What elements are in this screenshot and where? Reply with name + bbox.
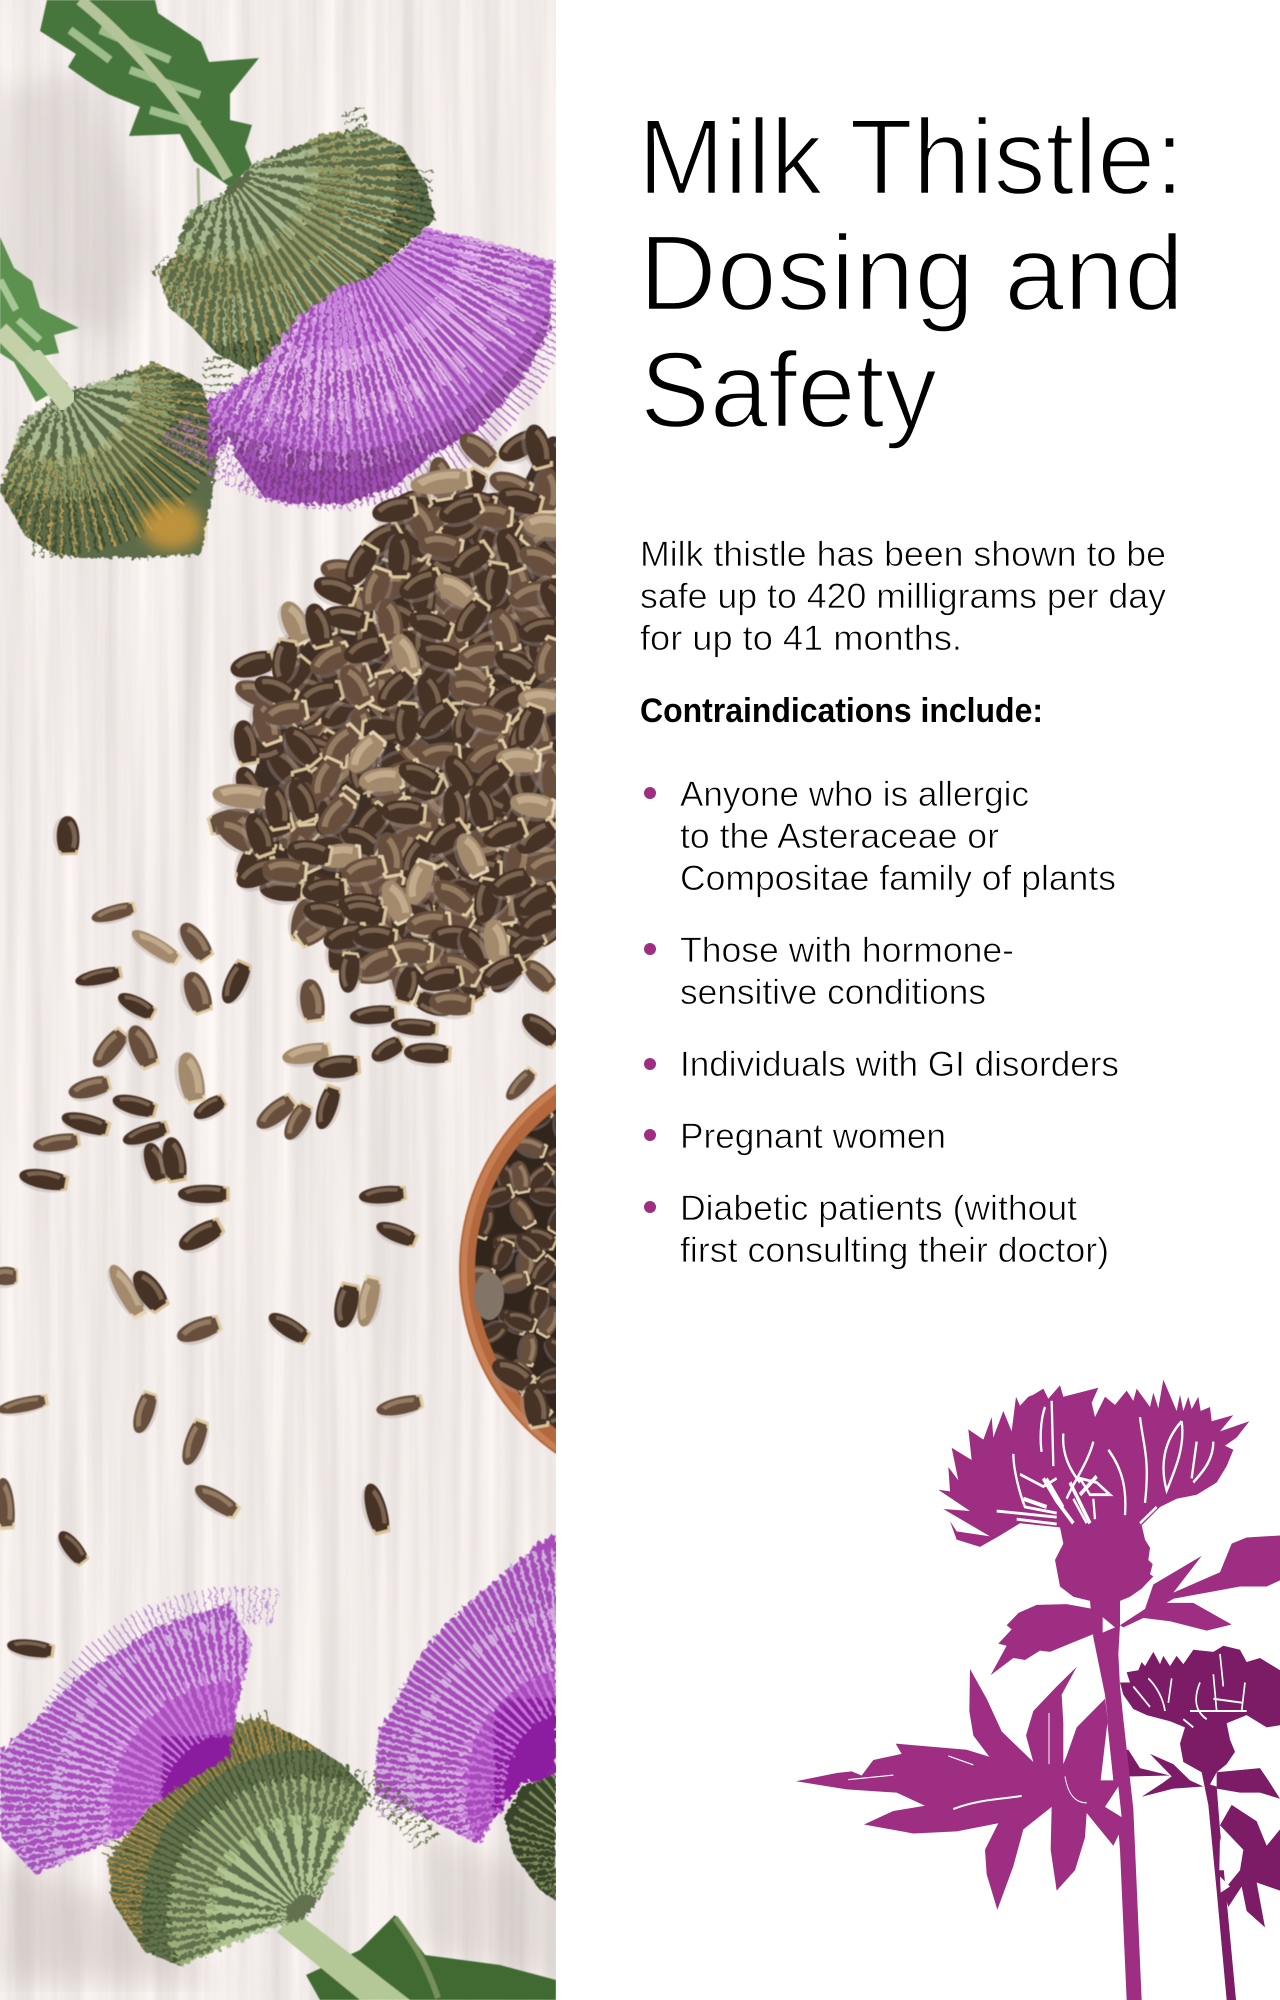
list item: allergy: to the Asteraceae or	[680, 817, 999, 856]
stem of left flower head	[30, 355, 70, 405]
intro text: for up to 41 months.	[640, 619, 962, 658]
small dark thistle	[1102, 1646, 1280, 2000]
stem and leaves: bottom flower	[277, 1912, 556, 2000]
title: Milk Thistle:	[638, 96, 1184, 217]
dark green bud: bottom right	[503, 1773, 556, 1902]
large thistle	[796, 1380, 1280, 2000]
green bud: left	[0, 355, 235, 562]
intro text: safe up to 420 milligrams per day	[640, 577, 1166, 616]
list item: diabetic patients: Diabetic patients (without	[680, 1189, 1077, 1228]
list item: allergy	[644, 775, 1116, 898]
green bud: bottom	[100, 1709, 441, 1968]
leaf and stem: top flower	[40, 0, 259, 210]
list item: hormone-sensitive conditions: sensitive conditions	[680, 973, 986, 1012]
wooden bowl of seeds	[458, 1083, 556, 1455]
list item: diabetic patients	[644, 1189, 1109, 1270]
wood background	[0, 0, 556, 2000]
list item: diabetic patients: first consulting their doctor)	[680, 1231, 1109, 1270]
purple flower: top	[161, 226, 556, 512]
title: Safety	[640, 329, 937, 450]
list item: allergy: Compositae family of plants	[680, 859, 1116, 898]
leaf and stem: left flower	[0, 237, 79, 402]
list item: hormone-sensitive conditions: Those with hormone-	[680, 931, 1014, 970]
intro text	[640, 535, 1166, 658]
list item: GI disorders: Individuals with GI disorders	[680, 1045, 1119, 1084]
title: Dosing and	[639, 212, 1184, 333]
list item: pregnant women: Pregnant women	[680, 1117, 946, 1156]
purple flower: bottom left	[0, 1586, 280, 1876]
bulleted list of contraindications	[644, 775, 1119, 1270]
intro text: Milk thistle has been shown to be	[640, 535, 1166, 574]
seed heap	[206, 424, 556, 1020]
illustration: purple thistle silhouettes	[796, 1380, 1280, 2000]
title	[638, 96, 1184, 450]
list item: allergy: Anyone who is allergic	[680, 775, 1029, 814]
green bud: top	[150, 106, 437, 378]
list item: hormone-sensitive conditions	[644, 931, 1014, 1012]
panel: photo of milk thistle flowers and seeds on white wood	[0, 0, 556, 2000]
purple flower: bottom right	[372, 1533, 556, 1844]
scattered seeds	[0, 816, 564, 1662]
subheading: contraindications: Contraindications include:	[640, 692, 1043, 730]
